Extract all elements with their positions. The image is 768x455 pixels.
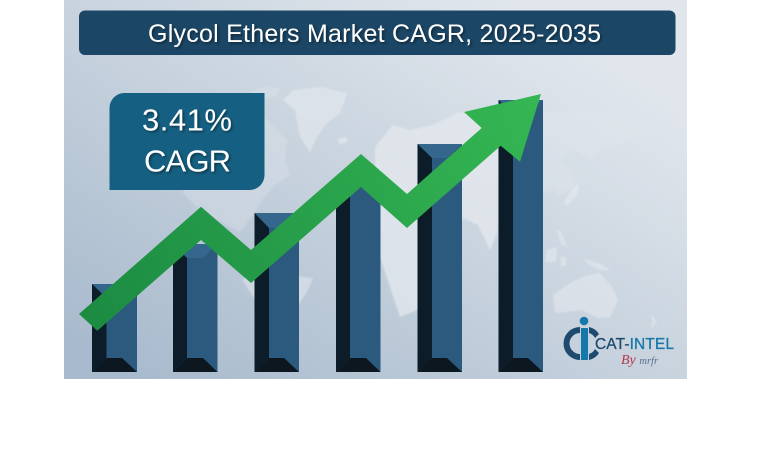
- map: Southeast Asia islands: [545, 230, 611, 270]
- panel: background: [64, 0, 687, 379]
- map: Africa lower: [417, 218, 463, 310]
- byline: By mrfr: [621, 353, 659, 368]
- bar 4: [336, 178, 380, 372]
- map: Greenland: [283, 87, 347, 152]
- icon: logo mark: [564, 317, 599, 360]
- map: New Zealand: [651, 313, 657, 329]
- map: arctic islands: [250, 87, 280, 100]
- map: Asia: [543, 110, 647, 197]
- map: Australia: [553, 273, 618, 318]
- wordmark: CAT-INTEL: [595, 336, 674, 353]
- CAGR callout: [110, 93, 264, 190]
- growth arrow: [79, 94, 541, 331]
- map: Iceland: [337, 137, 348, 144]
- map: South America: [242, 272, 313, 312]
- world map: [183, 87, 657, 329]
- CAGR label: CAGR: [144, 144, 231, 178]
- map: Eurasia and Africa: [375, 108, 498, 317]
- bar 6: [498, 100, 543, 372]
- logo: [564, 317, 674, 368]
- bar chart: [92, 100, 543, 372]
- bar 5: [418, 144, 462, 372]
- bar 3: [254, 213, 299, 372]
- title: Glycol Ethers Market CAGR, 2025-2035: [148, 20, 601, 48]
- bar 2: [173, 244, 218, 372]
- CAGR value: 3.41%: [142, 102, 232, 138]
- bar 1: [92, 284, 137, 372]
- title banner: [79, 10, 676, 55]
- map: North America: [183, 117, 290, 232]
- map: Japan: [564, 184, 579, 206]
